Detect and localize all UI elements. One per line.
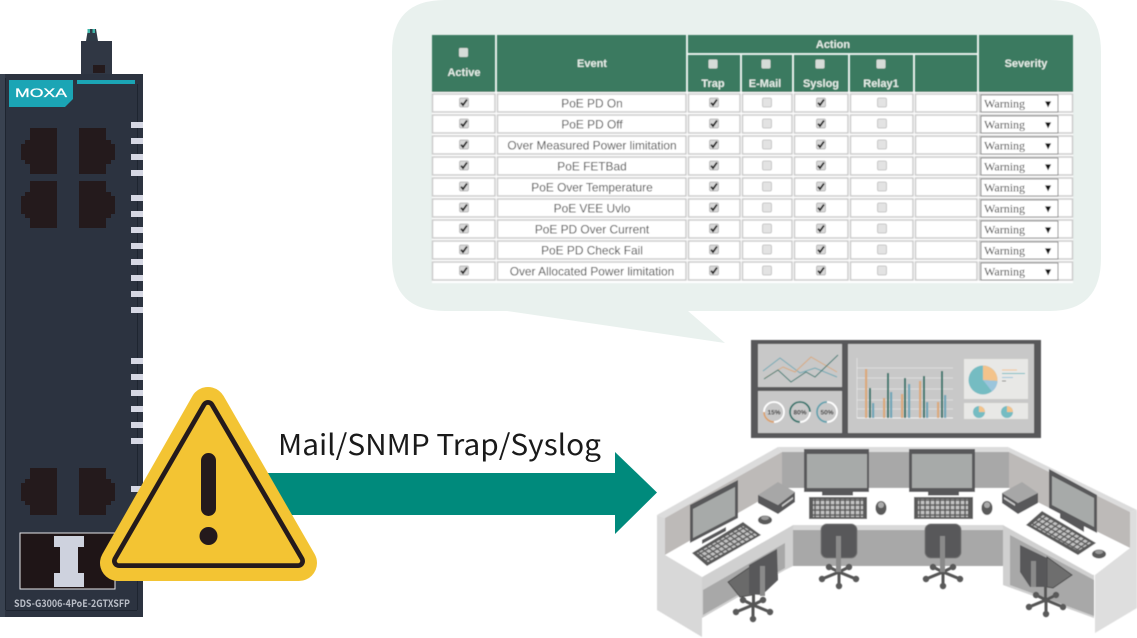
table row: PoE VEE Uvlo: PoE VEE Uvlo	[554, 202, 631, 216]
table row: Over Allocated Power limitation: Over Allocated Power limitation	[510, 264, 674, 278]
video wall	[751, 340, 1041, 438]
table row: PoE Over Temperature: PoE Over Temperature	[531, 180, 653, 194]
right end panel	[1095, 510, 1137, 633]
left partition	[657, 447, 782, 555]
table row: Over Allocated Power limitation: ▼	[1045, 268, 1052, 276]
mouse right	[1092, 550, 1106, 558]
video wall: 50%	[820, 410, 834, 416]
MOXA logo: MOXA	[15, 88, 67, 100]
computer left	[758, 482, 795, 514]
ethernet ports	[21, 128, 115, 515]
table row: PoE Over Temperature	[432, 178, 1072, 196]
table row: PoE PD Check Fail: ▼	[1045, 246, 1052, 256]
SFP port	[20, 533, 115, 589]
table header: Action	[816, 39, 850, 51]
table header: Trap	[701, 78, 725, 90]
right knee wall	[1003, 525, 1094, 618]
table row: PoE PD Off	[432, 115, 1072, 133]
table row: PoE PD Over Current: Warning	[984, 222, 1025, 236]
table row: PoE FETBad: Warning	[984, 160, 1025, 174]
keyboard center right	[914, 497, 973, 519]
table header: Event	[577, 58, 607, 70]
speech bubble	[392, 0, 1101, 343]
table row: Over Measured Power limitation: ▼	[1045, 142, 1052, 150]
MOXA logo	[9, 80, 73, 107]
back partition	[778, 447, 1009, 488]
table row: Over Measured Power limitation: Over Measured Power limitation	[507, 138, 677, 152]
keyboard center left	[809, 497, 867, 519]
chair center left	[819, 524, 859, 589]
video wall: 80%	[793, 410, 807, 416]
table row: PoE PD Off: Warning	[984, 118, 1025, 132]
table row: Over Measured Power limitation	[432, 136, 1072, 154]
arrow label: Mail/SNMP Trap/Syslog	[278, 423, 601, 464]
small pies panel	[964, 403, 1028, 419]
table row: PoE FETBad	[432, 157, 1072, 175]
table row: PoE VEE Uvlo	[432, 199, 1072, 217]
table row: Over Measured Power limitation: Warning	[984, 138, 1025, 152]
monitor right	[1049, 469, 1097, 533]
table header: E-Mail	[749, 78, 781, 90]
monitor center left	[804, 449, 869, 496]
table row: PoE PD Over Current	[432, 220, 1072, 238]
table row: Over Allocated Power limitation	[432, 262, 1072, 280]
table row: PoE VEE Uvlo: ▼	[1045, 204, 1052, 214]
left knee wall	[702, 525, 793, 618]
teal status bar	[77, 80, 135, 84]
model label: SDS-G3006-4PoE-2GTXSFP	[14, 595, 130, 610]
video wall: 15%	[767, 410, 781, 416]
table row: PoE Over Temperature: ▼	[1045, 184, 1052, 192]
chair left	[728, 549, 778, 622]
right partition	[1008, 447, 1137, 548]
table header: Relay1	[863, 78, 899, 90]
line chart	[763, 355, 838, 382]
center knee wall	[793, 525, 1004, 566]
table header: Active	[447, 67, 481, 79]
table row: PoE PD On: Warning	[984, 96, 1025, 110]
table row: PoE PD On: PoE PD On	[561, 96, 623, 110]
table row: PoE Over Temperature: Warning	[984, 180, 1025, 194]
keyboard right	[1026, 511, 1096, 555]
table row: PoE FETBad: ▼	[1045, 162, 1052, 172]
event settings table	[432, 35, 1073, 283]
table header	[432, 35, 1073, 92]
left end panel	[657, 515, 702, 637]
table row: PoE FETBad: PoE FETBad	[557, 160, 627, 174]
table row: PoE PD On: ▼	[1045, 100, 1052, 108]
table header: Severity	[1005, 58, 1048, 70]
table row: Over Allocated Power limitation: Warning	[984, 264, 1025, 278]
computer right	[1002, 482, 1038, 514]
keyboard left	[692, 522, 761, 566]
table row: PoE PD Off: PoE PD Off	[561, 118, 623, 132]
device top connector	[81, 29, 112, 75]
table row: PoE PD Check Fail: Warning	[984, 244, 1025, 258]
table row: PoE PD Over Current: ▼	[1045, 226, 1052, 234]
network switch device	[0, 29, 143, 617]
control room illustration	[657, 340, 1137, 637]
donut gauges	[764, 402, 837, 422]
mouse left	[758, 516, 772, 524]
table row: PoE PD Off: ▼	[1045, 120, 1052, 130]
table header: Syslog	[803, 78, 839, 90]
table row: PoE VEE Uvlo: Warning	[984, 202, 1025, 216]
bar chart	[857, 358, 953, 418]
mouse center left	[876, 501, 886, 515]
table row: PoE PD Check Fail	[432, 241, 1072, 259]
monitor left	[690, 480, 738, 544]
arrow	[262, 452, 657, 534]
workstation desks	[657, 447, 1137, 637]
monitor center right	[909, 449, 975, 496]
pie chart panel	[964, 359, 1028, 399]
table row: PoE PD On	[432, 94, 1072, 112]
chair center right	[923, 524, 963, 589]
table row: PoE PD Check Fail: PoE PD Check Fail	[541, 244, 643, 258]
desk top	[665, 488, 1130, 577]
warning icon	[118, 405, 299, 563]
table row: PoE PD Over Current: PoE PD Over Current	[535, 222, 650, 236]
mouse center right	[982, 501, 992, 515]
chair right	[1020, 545, 1072, 617]
side vents	[131, 122, 143, 492]
